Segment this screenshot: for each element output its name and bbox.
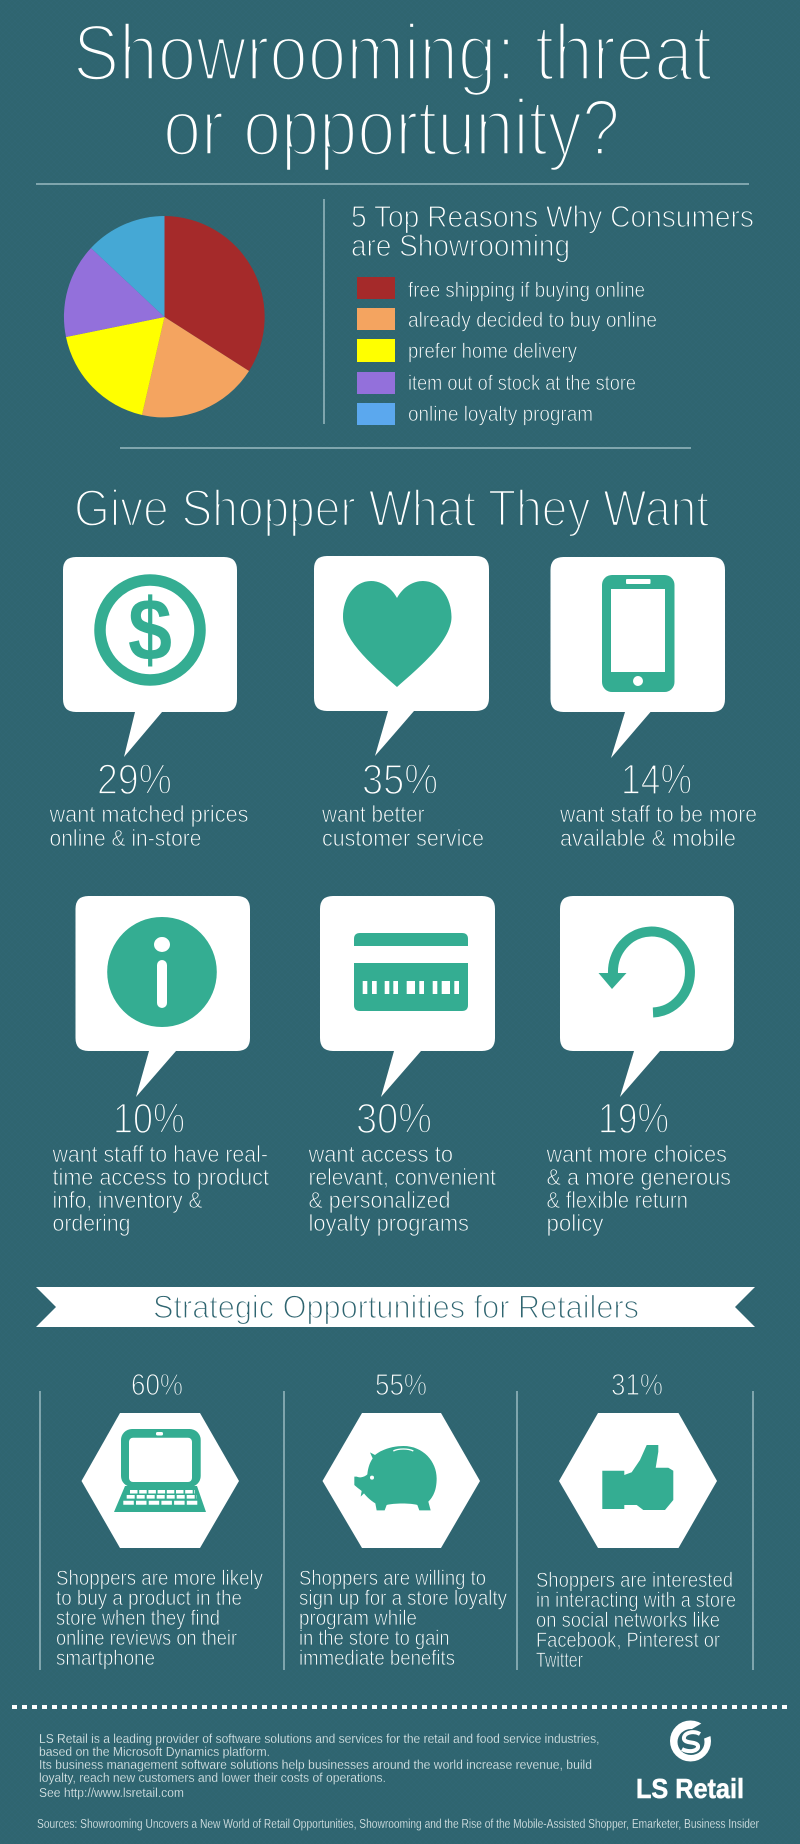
description: Shoppers are interested [536,1568,733,1592]
description: online & in-store [50,825,202,851]
banner: strategic opportunities: Strategic Opportunities for Retailers [153,1289,639,1325]
title: Showrooming: threat [73,8,712,97]
logo: LS Retail: LS Retail [636,1773,744,1804]
description: customer service [322,825,484,851]
description: store when they find [56,1606,220,1630]
description [299,1566,507,1670]
description: & personalized [308,1187,450,1213]
logo: LS Retail [636,1720,744,1804]
reasons heading: are Showrooming [351,228,570,263]
description: Facebook, Pinterest or [536,1628,720,1652]
description [546,1141,731,1236]
speech bubble with return arrow icon [560,896,734,1097]
stat 29%: 29% [97,756,172,804]
legend [357,277,657,426]
reasons heading [351,199,754,263]
stat 31%: 31% [611,1367,663,1402]
stat 10%: 10% [113,1095,185,1143]
description: want better [321,801,425,827]
panel: real-time access [52,896,269,1236]
description: want access to [308,1141,453,1167]
hexagon with thumbs up icon [559,1413,717,1548]
description: Shoppers are willing to [299,1566,486,1590]
stat 30%: 30% [356,1095,432,1143]
description: Twitter [536,1648,583,1672]
footer: about text: LS Retail is a leading provider of software solutions and services for the retail and food service industries, [39,1731,600,1746]
description: & flexible return [546,1187,688,1213]
description: Shoppers are more likely [56,1566,263,1590]
description: available & mobile [560,825,736,851]
stat 60%: 60% [131,1367,183,1402]
description [536,1568,736,1672]
description: loyalty programs [308,1210,469,1236]
stat 35%: 35% [362,756,438,804]
legend: item out of stock at the store [408,371,636,395]
panel: matched prices [49,557,249,851]
footer: about text: based on the Microsoft Dynamics platform. [39,1744,270,1759]
description: info, inventory & [52,1187,203,1213]
description: program while [299,1606,417,1630]
description: & a more generous [546,1164,731,1190]
description [559,801,757,851]
description: want matched prices [49,801,249,827]
pie chart [64,216,265,417]
panel: staff available [550,557,757,851]
description: ordering [52,1210,130,1236]
description [52,1141,269,1236]
heading: give shopper what they want: Give Shopper What They Want [74,480,709,538]
description: to buy a product in the [56,1586,242,1610]
description: want staff to be more [559,801,757,827]
speech bubble with dollar icon [63,557,237,757]
description: time access to product [52,1164,269,1190]
title: or opportunity? [163,83,620,172]
hexagon with piggy bank icon [322,1413,480,1548]
description [56,1566,263,1670]
description: in the store to gain [299,1626,450,1650]
stat 19%: 19% [598,1095,669,1143]
panel: top reasons [64,199,754,426]
description: policy [546,1210,604,1236]
stat 14%: 14% [621,756,692,804]
description: in interacting with a store [536,1588,736,1612]
footer: about text [39,1731,600,1800]
description: online reviews on their [56,1626,237,1650]
description [308,1141,496,1236]
footer: about text: See http://www.lsretail.com [39,1785,184,1800]
hexagon with laptop icon [82,1413,239,1548]
description: sign up for a store loyalty [299,1586,507,1610]
speech bubble with dollar icon: $ [128,580,172,679]
legend: already decided to buy online [408,308,657,332]
description: want staff to have real- [52,1141,268,1167]
speech bubble with phone icon [550,557,725,758]
panel: social networks [536,1367,736,1672]
legend: prefer home delivery [408,339,577,363]
banner: strategic opportunities [36,1287,755,1327]
stat 55%: 55% [375,1367,427,1402]
footer: about text: loyalty, reach new customers and lower their costs of operations. [39,1770,386,1785]
footer: about text: Its business management software solutions help businesses around the world increase revenue, build [39,1757,592,1772]
description [49,801,249,851]
panel: loyalty programs [308,896,496,1236]
description: want more choices [546,1141,727,1167]
legend: online loyalty program [408,402,593,426]
legend: free shipping if buying online [408,278,645,302]
reasons heading: 5 Top Reasons Why Consumers [351,199,754,234]
description: immediate benefits [299,1646,455,1670]
speech bubble with card icon [320,896,495,1097]
panel: return policy [546,896,734,1236]
speech bubble with heart icon [314,556,489,756]
description [321,801,484,851]
speech bubble with info icon [76,896,250,1097]
description: smartphone [56,1646,155,1670]
description: on social networks like [536,1608,720,1632]
panel: customer service [314,556,489,851]
title [73,8,712,172]
panel: online reviews [56,1367,263,1670]
panel: store loyalty sign up [299,1367,507,1670]
description: relevant, convenient [308,1164,496,1190]
